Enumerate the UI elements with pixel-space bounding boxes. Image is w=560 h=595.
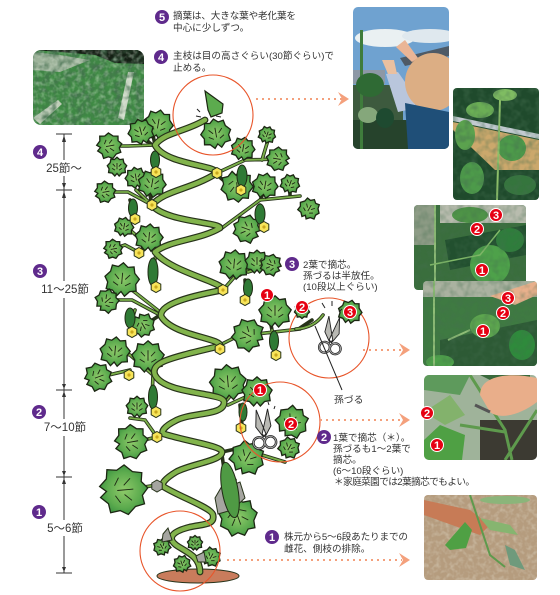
main stem [152,120,224,572]
step 3 note: (10段以上ぐらい) [303,281,378,293]
step 1 note: 1 [269,532,275,544]
photo: cucumber on pipe rail [453,88,539,200]
photo: pinching stage 3 B: 3 [505,293,511,305]
photo: pinching stage 3 A: 2 [474,224,480,236]
height scale with node ranges: 4 [37,147,44,159]
callout circle: plant base [140,511,220,591]
leaves [81,107,324,574]
height scale with node ranges: 11～25節 [41,282,89,296]
photo: pinching stage 2 with hand: 1 [434,440,440,452]
step 3 note: 3 [289,259,295,271]
step 5 note [155,10,296,34]
step 2 note [317,430,475,488]
callout circle: step 3 pinching [289,298,369,378]
removed flower nodes [152,480,245,562]
step 3 note: 孫づるは半放任。 [303,270,380,282]
step 1 note: 雌花、側枝の排除。 [284,543,370,555]
step 2 note: 孫づるも1～2葉で [333,443,411,455]
numbered red markers on illustration [254,288,356,431]
step 1 note: 株元から5～6段あたりまでの [284,531,408,543]
numbered red markers on illustration: 1 [264,290,270,302]
callout circle: step 2 pinching [240,382,320,462]
side branches [100,130,312,510]
step 2 note: ＊家庭菜園では2葉摘芯でもよい。 [334,476,475,488]
step 5 note: 中心に少しずつ。 [173,22,249,34]
numbered red markers on illustration: 2 [288,419,294,431]
height scale with node ranges: 2 [36,407,42,419]
soil mound [157,569,239,583]
step 2 note: 1葉で摘芯（＊）。 [333,432,410,444]
height scale with node ranges: 3 [37,266,43,278]
step 4 note [154,50,334,74]
height scale with node ranges: 7～10節 [44,420,86,434]
step 5 note: 5 [159,12,165,24]
step 4 note: 止める。 [173,62,211,74]
numbered red markers on illustration: 2 [299,302,305,314]
step 4 note: 主枝は目の高さぐらい(30節ぐらい)で [173,50,334,62]
cucumbers [125,151,278,519]
step 2 note: 2 [321,432,327,444]
numbered red markers on illustration: 3 [347,307,353,319]
photo: pinching stage 3 A [414,205,526,290]
label: grandchild vine [315,326,363,406]
photo: seedling and hand [424,495,537,580]
photo: pinching stage 3 B: 2 [500,308,506,320]
dotted arrows to photos [227,92,410,567]
photo: pinching stage 3 A: 1 [479,265,485,277]
step 2 note: (6～10段ぐらい) [333,465,403,477]
numbered red markers on illustration: 1 [257,385,263,397]
label: grandchild vine: 孫づる [334,394,363,406]
step 5 note: 摘葉は、大きな葉や老化葉を [173,10,296,22]
photo: pinching stage 2 with hand: 2 [424,408,430,420]
step 3 note [285,257,380,293]
step 4 note: 4 [158,52,165,64]
photo: pinching stage 3 B: 1 [480,326,486,338]
photo: cucumber field [33,50,144,125]
height scale with node ranges: 5～6節 [47,521,83,535]
height scale with node ranges: 25節～ [46,161,82,175]
callout circle: top pinching [173,75,253,155]
cucumber plant illustration [81,107,324,574]
photo: pinching stage 3 A: 3 [493,210,499,222]
step 1 note [265,530,408,555]
step 3 note: 2葉で摘芯。 [303,259,356,271]
height scale with node ranges: 1 [36,507,42,519]
photo: person in straw hat pinching [353,7,449,149]
photo: pinching stage 3 B [423,281,537,369]
flowers [124,166,281,442]
step 2 note: 摘芯。 [333,454,362,466]
photo: pinching stage 2 with hand [420,375,537,460]
height scale with node ranges [32,134,94,573]
